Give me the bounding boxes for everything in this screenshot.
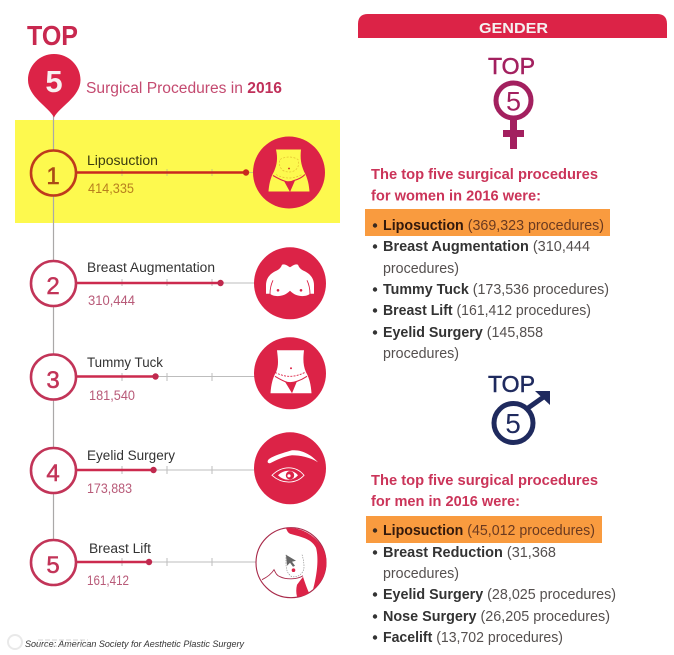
men list <box>366 516 616 646</box>
row 5: Breast Lift: Breast Lift <box>89 541 151 556</box>
watermark <box>8 635 88 649</box>
row 4: Eyelid Surgery: 173,883 <box>87 481 132 496</box>
women heading: The top five surgical procedures <box>371 167 598 183</box>
icon: pin with 5 <box>28 54 80 118</box>
row 2: Breast Augmentation: 2 <box>46 273 60 300</box>
women list: Tummy Tuck (173,536 procedures) <box>383 282 609 298</box>
icon: male top 5: 5 <box>505 408 521 439</box>
women list: Breast Lift (161,412 procedures) <box>383 303 591 319</box>
row 4: Eyelid Surgery: Eyelid Surgery <box>87 448 175 463</box>
row 5: Breast Lift: 161,412 <box>87 573 129 588</box>
row 2: Breast Augmentation <box>31 247 326 319</box>
row 4: Eyelid Surgery: 4 <box>46 460 60 487</box>
men list: Liposuction (45,012 procedures) <box>383 523 595 539</box>
row 3: Tummy Tuck: Tummy Tuck <box>87 355 163 370</box>
timeline spine <box>52 115 54 545</box>
women list: procedures) <box>383 346 459 362</box>
subtitle: Surgical Procedures in 2016 <box>86 80 282 97</box>
row 1: Liposuction: 1 <box>46 163 60 190</box>
icon: pin with 5: 5 <box>45 64 63 99</box>
highlight: women liposuction <box>365 209 610 236</box>
icon: eye <box>254 432 326 504</box>
row 1: Liposuction: Liposuction <box>87 153 158 168</box>
icon: female top 5: TOP <box>488 53 535 79</box>
source note: Source: American Society for Aesthetic Plastic Surgery <box>25 639 245 650</box>
title: TOP <box>27 20 78 51</box>
row 2: Breast Augmentation: 310,444 <box>88 293 135 308</box>
men list: Facelift (13,702 procedures) <box>383 630 563 646</box>
men list: Breast Reduction (31,368 <box>383 545 556 561</box>
row 5: Breast Lift <box>31 528 327 598</box>
men list: procedures) <box>383 566 459 582</box>
men heading: The top five surgical procedures <box>371 473 598 489</box>
women list <box>365 209 610 362</box>
men list: Nose Surgery (26,205 procedures) <box>383 609 610 625</box>
title <box>27 20 282 118</box>
icon: female top 5: 5 <box>506 86 521 116</box>
women list: Liposuction (369,323 procedures) <box>383 218 604 234</box>
women heading <box>371 167 598 204</box>
icon: female top 5 <box>488 53 535 149</box>
icon: male top 5: TOP <box>488 371 535 397</box>
yellow highlight <box>15 120 340 223</box>
icon: breast lift <box>256 528 327 598</box>
women list: procedures) <box>383 261 459 277</box>
row 1: Liposuction <box>31 136 325 208</box>
row 4: Eyelid Surgery <box>31 432 326 504</box>
men heading <box>371 473 598 510</box>
icon: tummy <box>254 337 326 409</box>
men heading: for men in 2016 were: <box>371 494 520 510</box>
men list: Eyelid Surgery (28,025 procedures) <box>383 587 616 603</box>
row 2: Breast Augmentation: Breast Augmentation <box>87 260 215 275</box>
highlight: men liposuction <box>366 516 602 543</box>
row 5: Breast Lift: 5 <box>46 552 60 579</box>
row 1: Liposuction: 414,335 <box>88 181 134 196</box>
row 3: Tummy Tuck: 181,540 <box>89 388 135 403</box>
icon: waist <box>253 136 325 208</box>
row 3: Tummy Tuck <box>31 337 326 409</box>
icon: male top 5 <box>488 371 550 442</box>
gender header bar: GENDER <box>479 20 548 37</box>
women list: Breast Augmentation (310,444 <box>383 239 590 255</box>
row 3: Tummy Tuck: 3 <box>46 367 60 394</box>
women heading: for women in 2016 were: <box>371 188 541 204</box>
icon: breasts <box>254 247 326 319</box>
women list: Eyelid Surgery (145,858 <box>383 325 543 341</box>
gender header bar <box>358 14 667 38</box>
